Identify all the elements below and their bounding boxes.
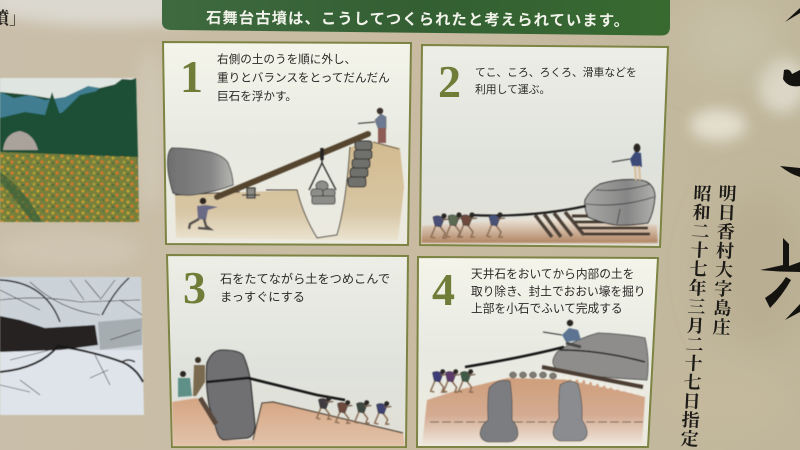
step number 4: 4: [432, 264, 455, 315]
rope: [470, 206, 586, 216]
step number 3: 3: [183, 262, 206, 313]
left workers: [178, 357, 205, 397]
title banner: [162, 0, 670, 36]
stone mound: [3, 131, 38, 150]
roller track: [542, 367, 643, 387]
left standing stone: [480, 380, 518, 442]
stone: [585, 180, 655, 225]
step number 2: 2: [438, 56, 461, 107]
illustration 3: [172, 350, 405, 446]
mountains: [0, 86, 100, 118]
right standing stone: [553, 381, 587, 441]
large calligraphy fragments: [760, 8, 800, 320]
caption 4: 取り除き、封土でおおい壕を掘り: [471, 284, 646, 298]
caption 2: てこ、ころ、ろくろ、滑車などを: [475, 65, 637, 79]
capstone: [553, 333, 648, 380]
standing overseer: [612, 144, 642, 180]
wooden track: [572, 216, 650, 234]
boulder: [168, 148, 233, 195]
rollers: [535, 212, 584, 237]
designation text: village address: 明日香村大字島庄: [710, 183, 737, 337]
caption 2: 利用して運ぶ。: [475, 83, 550, 96]
designation text: date: 昭和二十七年三月二十七日指定: [678, 183, 712, 449]
rope: [465, 347, 564, 367]
overseer on capstone: [543, 320, 581, 347]
photo: flower field with stone mound: [0, 78, 139, 222]
caption 1: 重りとバランスをとってだんだん: [217, 70, 390, 84]
flower field: [0, 152, 139, 222]
caption 1: 巨石を浮かす。: [217, 90, 297, 103]
illustration 2: [421, 144, 658, 243]
pullers: [431, 369, 475, 392]
panel 4: placing the capstone: [417, 257, 658, 447]
banner text: 石舞台古墳は、こうしてつくられたと考えられています。: [206, 8, 629, 30]
illustration 1: [168, 108, 404, 241]
caption 4: 上部を小石でふいて完成する: [471, 302, 623, 316]
photo: snowy landscape with bare branches: [0, 277, 144, 415]
fulcrum: [242, 188, 260, 198]
caption 3: 石をたてながら土をつめこんで: [220, 271, 390, 286]
caption 1: 右側の土のうを順に外し、: [217, 52, 356, 66]
lever beam: [217, 134, 368, 197]
illustration 4: [422, 320, 648, 445]
person on hill: [358, 108, 386, 143]
panel 1: levering the boulder: [163, 42, 411, 245]
ramp: [200, 398, 216, 424]
crouching person: [189, 198, 218, 229]
panel 3: raising the stone: [167, 255, 408, 447]
dark tree line: [0, 316, 98, 352]
right pullers: [317, 396, 391, 424]
small stone row: [510, 372, 556, 379]
trees: [0, 79, 138, 158]
step number 1: 1: [180, 51, 203, 102]
caption 3: まっすぐにする: [220, 290, 305, 304]
team of pullers: [431, 212, 505, 238]
hanging weights: [309, 148, 336, 204]
stacked sandbags: [348, 141, 372, 187]
panel 2: hauling the stone: [420, 45, 668, 247]
rope: [207, 378, 345, 400]
caption 4: 天井石をおいてから内部の土を: [471, 267, 634, 281]
upright stone: [206, 350, 255, 440]
branches: [0, 278, 143, 395]
